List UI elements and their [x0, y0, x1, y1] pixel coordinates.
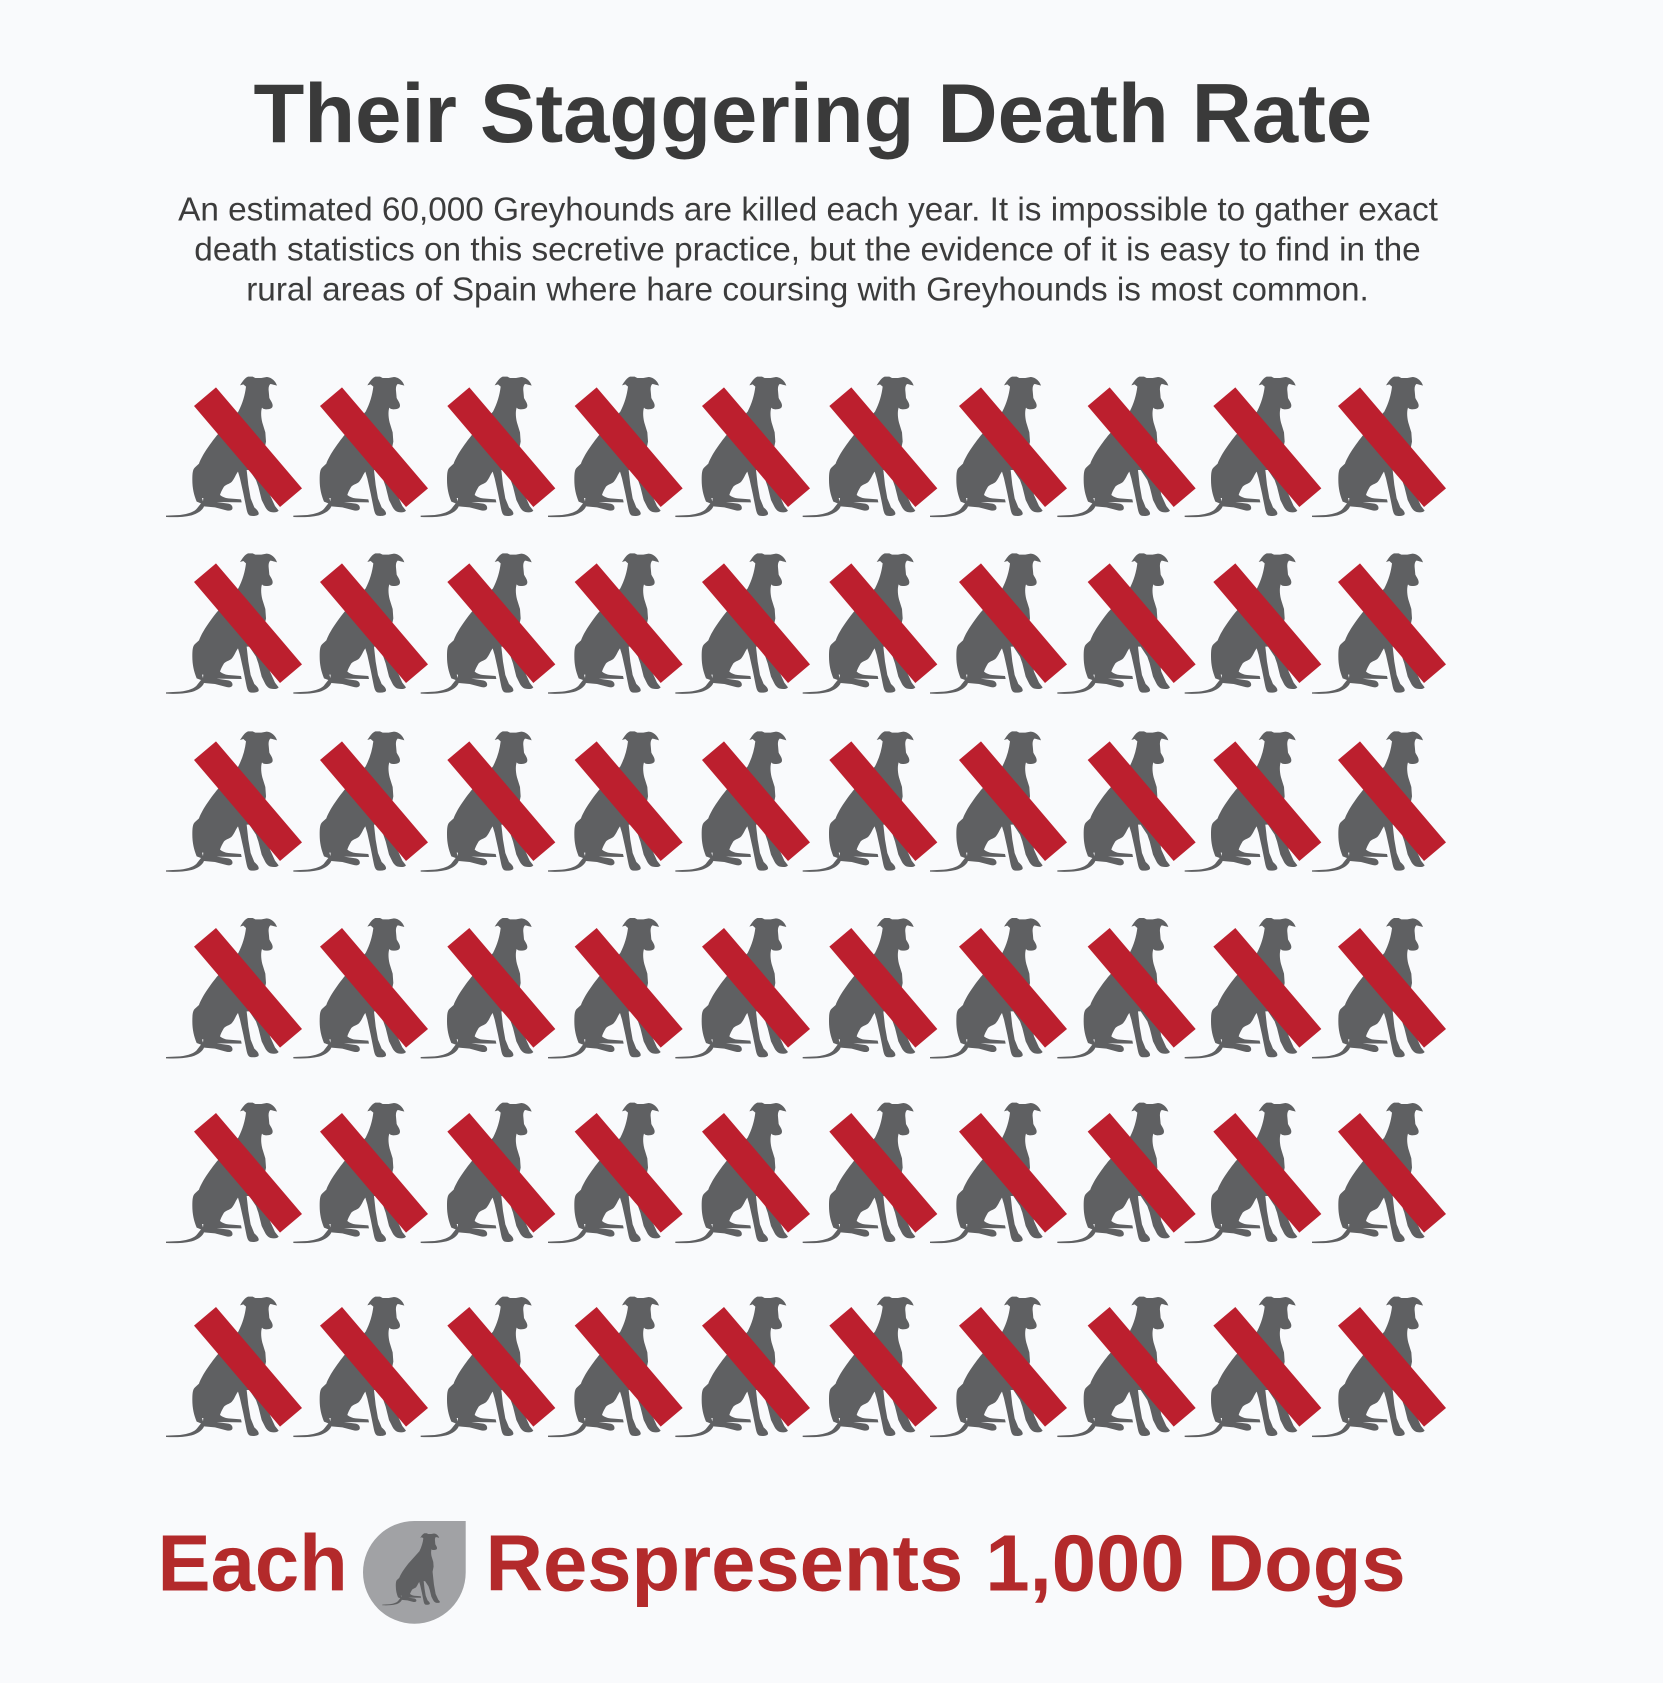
- icon: crossed-out dog: [1185, 377, 1321, 517]
- icon: crossed-out dog: [166, 1103, 302, 1243]
- icon: crossed-out dog: [675, 377, 810, 517]
- icon: crossed-out dog: [1185, 1103, 1321, 1243]
- icon: crossed-out dog: [930, 377, 1067, 517]
- icon: teardrop with dog: [363, 1521, 466, 1624]
- legend: [158, 1519, 1406, 1624]
- icon: crossed-out dog: [930, 731, 1067, 872]
- icon: crossed-out dog: [421, 1103, 555, 1243]
- icon: crossed-out dog: [1185, 731, 1321, 872]
- icon: crossed-out dog: [1185, 918, 1321, 1058]
- icon: crossed-out dog: [1057, 377, 1196, 517]
- icon: crossed-out dog: [421, 1297, 555, 1437]
- icon: crossed-out dog: [548, 1103, 683, 1243]
- icon: crossed-out dog: [548, 918, 683, 1058]
- icon: crossed-out dog: [1312, 553, 1446, 694]
- icon: crossed-out dog: [803, 553, 937, 694]
- legend text: Each: Each: [158, 1519, 348, 1608]
- icon: crossed-out dog: [1185, 1297, 1321, 1437]
- row 6: [166, 1297, 1446, 1437]
- icon: crossed-out dog: [803, 918, 937, 1058]
- icon: crossed-out dog: [1312, 377, 1446, 517]
- icon: crossed-out dog: [1057, 1103, 1196, 1243]
- icon: crossed-out dog: [421, 553, 555, 694]
- icon: crossed-out dog: [675, 1297, 810, 1437]
- icon: crossed-out dog: [1185, 553, 1321, 694]
- icon: crossed-out dog: [166, 377, 302, 517]
- icon: crossed-out dog: [930, 1103, 1067, 1243]
- icon: crossed-out dog: [1057, 731, 1196, 872]
- row 1: [166, 377, 1446, 517]
- title: Their Staggering Death Rate: [253, 67, 1372, 160]
- icon: crossed-out dog: [1057, 918, 1196, 1058]
- icon: crossed-out dog: [166, 553, 302, 694]
- icon: crossed-out dog: [293, 918, 428, 1058]
- icon: crossed-out dog: [1312, 918, 1446, 1058]
- icon: crossed-out dog: [930, 1297, 1067, 1437]
- icon: crossed-out dog: [930, 918, 1067, 1058]
- icon: crossed-out dog: [548, 1297, 683, 1437]
- icon: crossed-out dog: [930, 553, 1067, 694]
- icon: crossed-out dog: [1312, 1297, 1446, 1437]
- row 5: [166, 1103, 1446, 1243]
- legend text: Respresents 1,000 Dogs: Respresents 1,000 Dogs: [486, 1519, 1406, 1608]
- intro text block: An estimated 60,000 Greyhounds are killed each year. It is impossible to gather exact: [178, 192, 1439, 229]
- icon: crossed-out dog: [421, 731, 555, 872]
- icon: crossed-out dog: [293, 1103, 428, 1243]
- icon: crossed-out dog: [803, 731, 937, 872]
- icon: crossed-out dog: [293, 1297, 428, 1437]
- icon: crossed-out dog: [293, 553, 428, 694]
- row 2: [166, 553, 1446, 694]
- icon: crossed-out dog: [293, 377, 428, 517]
- icon: crossed-out dog: [166, 1297, 302, 1437]
- icon: crossed-out dog: [803, 1103, 937, 1243]
- icon: crossed-out dog: [675, 918, 810, 1058]
- icon: crossed-out dog: [421, 377, 555, 517]
- icon: crossed-out dog: [293, 731, 428, 872]
- icon: crossed-out dog: [675, 553, 810, 694]
- row 3: [166, 731, 1446, 872]
- icon: crossed-out dog: [548, 553, 683, 694]
- icon: crossed-out dog: [803, 377, 937, 517]
- icon: crossed-out dog: [548, 731, 683, 872]
- icon: crossed-out dog: [421, 918, 555, 1058]
- intro text block: death statistics on this secretive practice, but the evidence of it is easy to find in the: [194, 232, 1421, 269]
- pictogram grid: 60 crossed-out dogs: [166, 377, 1446, 1437]
- icon: crossed-out dog: [1312, 1103, 1446, 1243]
- icon: crossed-out dog: [1057, 553, 1196, 694]
- icon: crossed-out dog: [166, 731, 302, 872]
- row 4: [166, 918, 1446, 1058]
- icon: crossed-out dog: [675, 731, 810, 872]
- icon: crossed-out dog: [675, 1103, 810, 1243]
- icon: crossed-out dog: [1312, 731, 1446, 872]
- icon: crossed-out dog: [803, 1297, 937, 1437]
- intro text block: rural areas of Spain where hare coursing with Greyhounds is most common.: [246, 272, 1369, 309]
- icon: crossed-out dog: [548, 377, 683, 517]
- icon: crossed-out dog: [166, 918, 302, 1058]
- icon: crossed-out dog: [1057, 1297, 1196, 1437]
- intro text block: [178, 192, 1439, 309]
